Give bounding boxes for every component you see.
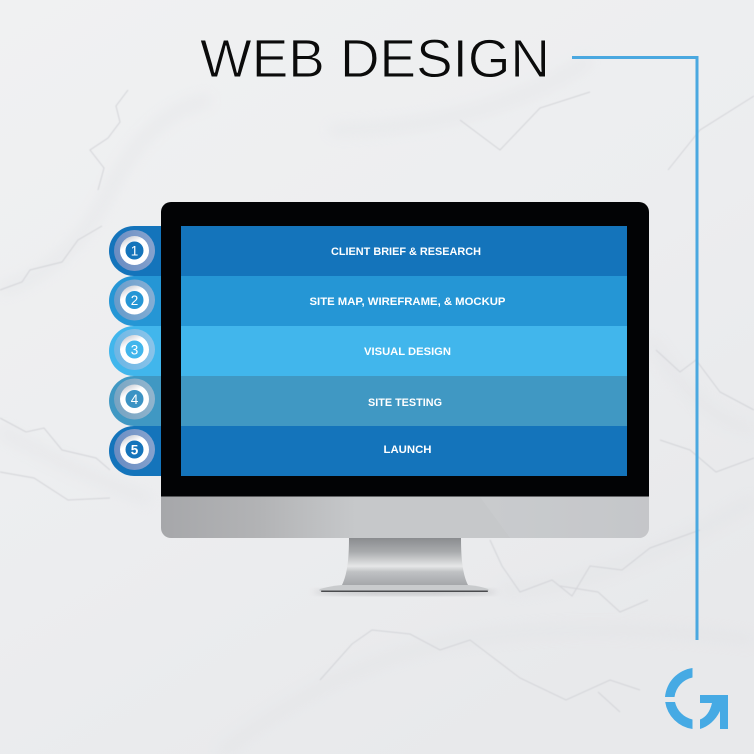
band 4 <box>181 376 627 426</box>
band 4: SITE TESTING <box>368 397 442 409</box>
band 3 <box>181 326 627 376</box>
step 2 tab: 2 <box>131 293 138 308</box>
step 1 tab: 1 <box>131 244 138 258</box>
band 3: VISUAL DESIGN <box>364 346 451 358</box>
band 5 <box>181 426 627 476</box>
step 5 tab <box>109 426 170 476</box>
step 2 tab <box>109 276 170 326</box>
monitor bezel <box>161 202 649 496</box>
step tabs <box>109 226 170 476</box>
band 1 <box>181 226 627 276</box>
monitor chin <box>161 490 649 538</box>
step 1 tab <box>109 226 170 276</box>
band 1: CLIENT BRIEF & RESEARCH <box>331 246 481 258</box>
step 4 tab <box>109 376 170 426</box>
band 2: SITE MAP, WIREFRAME, & MOCKUP <box>310 296 506 308</box>
band 5: LAUNCH <box>384 444 432 456</box>
screen <box>181 226 627 476</box>
step 3 tab: 3 <box>131 342 138 358</box>
connector line <box>572 58 697 640</box>
step 5 tab: 5 <box>131 442 139 458</box>
monitor stand <box>319 538 489 592</box>
monitor <box>161 202 649 538</box>
logo <box>665 668 728 729</box>
step 3 tab <box>109 326 170 376</box>
step 4 tab: 4 <box>131 392 139 407</box>
title: WEB DESIGN <box>200 29 550 89</box>
band 2 <box>181 276 627 326</box>
monitor shadow <box>313 588 497 596</box>
